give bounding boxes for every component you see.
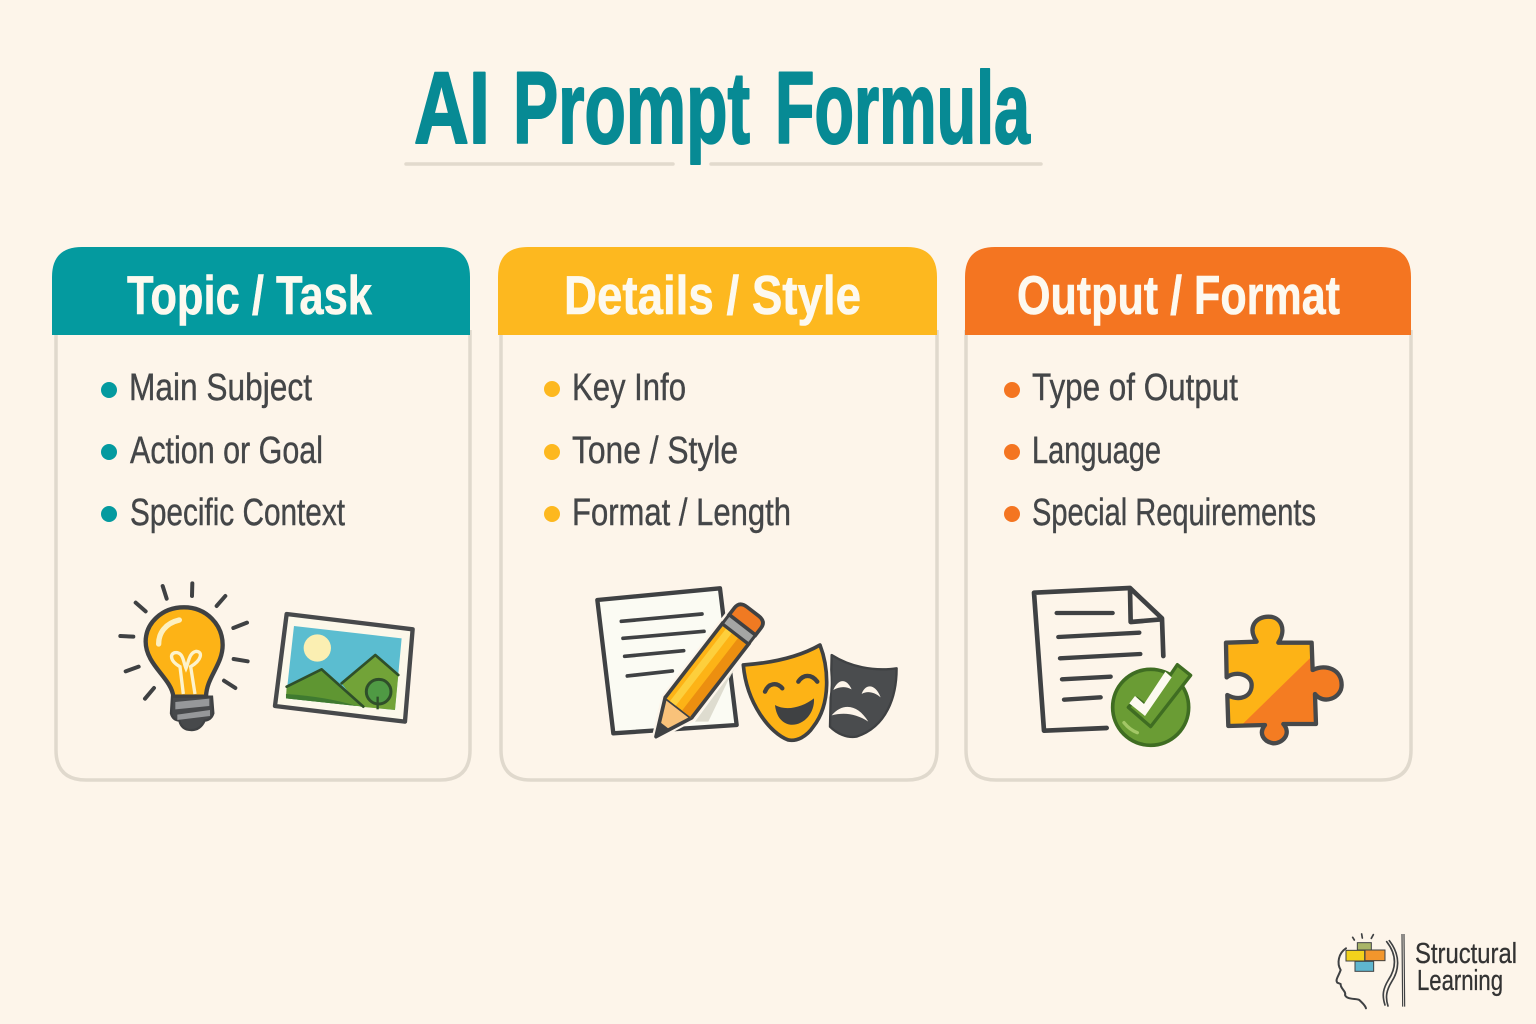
panel: Output / Format — [965, 247, 1411, 780]
list: Details / Style items: Tone / Style — [572, 430, 738, 472]
list: Output / Format items: Special Requirements — [1032, 492, 1316, 534]
panel: Details / Style — [498, 247, 937, 780]
icon: light bulb — [120, 583, 248, 730]
panel header: Output / Format: Output / Format — [1017, 264, 1340, 326]
icon: theatre masks — [743, 645, 897, 740]
icon: head with building blocks — [1337, 934, 1405, 1008]
logo wordmark: Learning — [1417, 965, 1503, 997]
title: Prompt — [513, 51, 750, 165]
panel header: Details / Style: Details / Style — [564, 264, 861, 326]
list: Output / Format items: Type of Output — [1032, 367, 1238, 409]
list: Details / Style items: Format / Length — [572, 492, 791, 534]
icon: paper and pencil — [597, 588, 766, 747]
icon: puzzle piece — [1226, 617, 1353, 750]
panel header: Topic / Task — [52, 247, 470, 335]
icon: landscape picture — [275, 614, 413, 722]
logo wordmark: Structural — [1415, 938, 1517, 970]
list: Topic / Task items: Main Subject — [129, 367, 312, 409]
logo: Structural Learning — [1337, 934, 1517, 1008]
title: Formula — [775, 51, 1031, 165]
list: Topic / Task items — [101, 367, 345, 534]
panel header: Topic / Task: Topic / Task — [127, 264, 372, 326]
list: Details / Style items: Key Info — [572, 367, 686, 409]
list: Topic / Task items: Action or Goal — [130, 430, 323, 472]
panel header: Details / Style — [498, 247, 937, 335]
logo wordmark — [1415, 938, 1517, 997]
list: Output / Format items — [1004, 367, 1316, 534]
panel: Topic / Task — [52, 247, 470, 780]
list: Output / Format items: Language — [1032, 430, 1161, 472]
list: Details / Style items — [544, 367, 791, 534]
panel header: Output / Format — [965, 247, 1411, 335]
list: Topic / Task items: Specific Context — [130, 492, 345, 534]
title: AI — [414, 51, 490, 165]
icon: document with check mark — [1034, 588, 1191, 745]
title — [406, 51, 1041, 165]
